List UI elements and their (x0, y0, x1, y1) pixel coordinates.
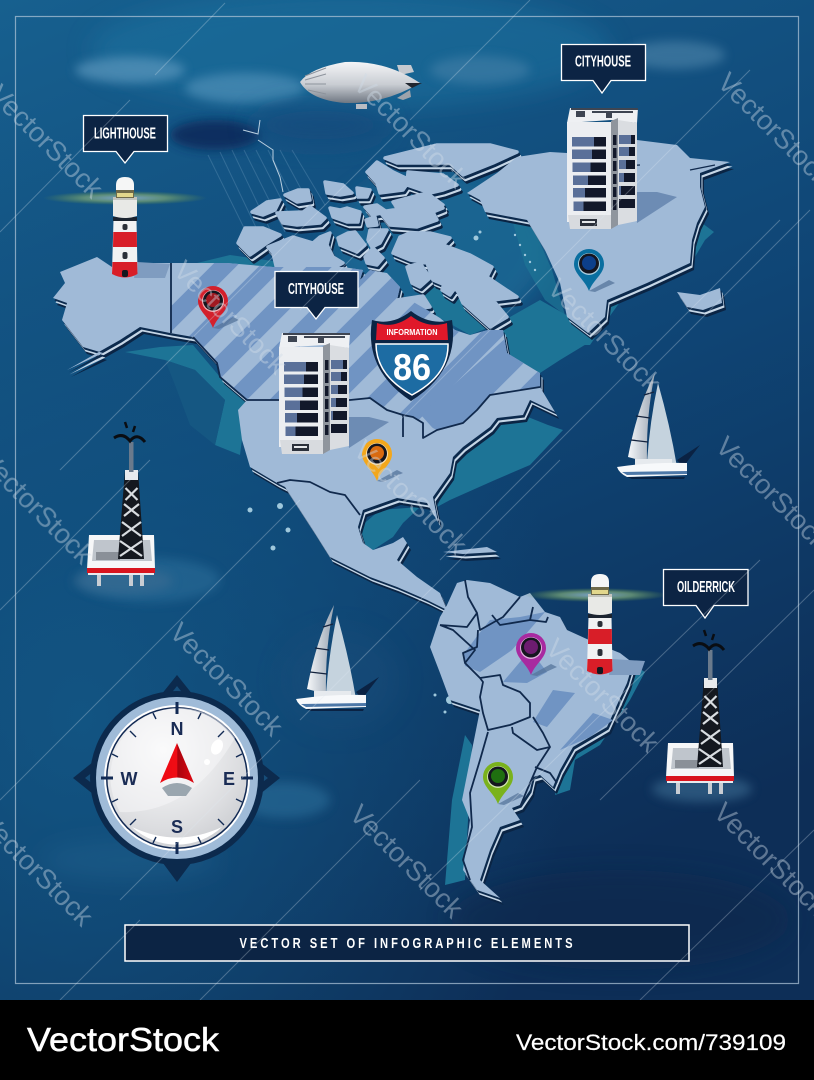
highway sign: 86 (393, 347, 431, 388)
panel: map of the Americas (53, 140, 734, 905)
compass: N (170, 719, 184, 739)
icon: middle building (279, 333, 389, 454)
label: oilderrick (664, 570, 748, 618)
label: cityhouse middle: CITYHOUSE (288, 281, 344, 298)
land ledge line (54, 142, 732, 900)
icon: pin red (198, 286, 239, 329)
clouds (75, 41, 725, 150)
watermarks: VectorStock (348, 68, 474, 194)
highway sign: INFORMATION (386, 327, 438, 337)
icon: east sailboat (617, 373, 700, 479)
land shadow (57, 147, 734, 905)
icon: south lighthouse (587, 574, 645, 675)
compass: S (171, 817, 183, 837)
icon: north lighthouse (112, 177, 170, 278)
compass: W (120, 769, 138, 789)
footer band: VectorStock.com/739109 (516, 1030, 786, 1055)
label: oilderrick: OILDERRICK (677, 579, 735, 596)
caption bar (125, 925, 689, 961)
light beam: south lighthouse (524, 588, 668, 602)
south america stripes (463, 612, 613, 750)
caption bar: VECTOR SET OF INFOGRAPHIC ELEMENTS (240, 935, 576, 952)
icon: west oil derrick (73, 422, 173, 594)
land ledge highlight (56, 144, 732, 902)
blimp (300, 62, 422, 109)
highway sign (371, 311, 453, 401)
icon: east oil derrick (652, 630, 752, 802)
rain and lightning (208, 120, 325, 240)
watermarks: VectorStock (540, 632, 666, 758)
label: cityhouse middle (275, 272, 358, 319)
light beam: north lighthouse (43, 191, 207, 205)
watermarks: VectorStock (344, 798, 470, 924)
icon: pin green (483, 762, 524, 805)
watermarks: VectorStock (348, 434, 474, 560)
label: cityhouse north: CITYHOUSE (575, 54, 631, 70)
icon: pin blue (574, 249, 615, 292)
label: lighthouse: LIGHTHOUSE (94, 126, 156, 142)
watermarks: VectorStock (164, 616, 290, 742)
land masses (53, 140, 730, 898)
teal continental shelf (125, 220, 714, 885)
borders (171, 165, 715, 880)
label: lighthouse (84, 116, 168, 163)
compass (73, 675, 280, 882)
compass: E (223, 769, 235, 789)
label: cityhouse north (562, 44, 646, 93)
icon: north building (567, 108, 677, 229)
icon: pin orange (362, 439, 403, 482)
diagonal map stripes (170, 263, 540, 430)
watermarks: VectorStock (168, 254, 294, 380)
icon: south sailboat (296, 605, 379, 711)
icon: pin purple (516, 633, 557, 676)
watermarks: VectorStock (542, 272, 668, 398)
footer band: VectorStock (27, 1021, 220, 1058)
footer band (0, 1000, 814, 1080)
